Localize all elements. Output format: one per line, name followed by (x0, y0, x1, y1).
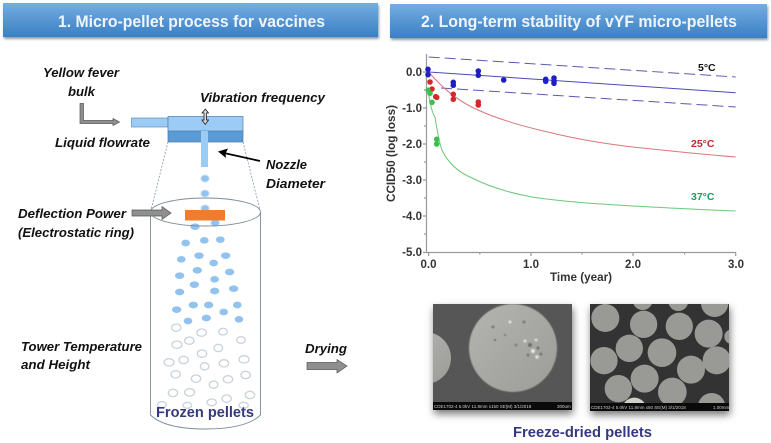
arrow: deflection power (132, 206, 171, 220)
data points 5C (425, 66, 557, 88)
tower cylinder (150, 198, 260, 429)
y axis labels (402, 67, 422, 259)
x axis labels: 3.0 (728, 259, 744, 271)
caption: freeze-dried pellets: Freeze-dried pellets (513, 425, 652, 441)
x axis labels (420, 259, 744, 271)
header: micro-pellet process (3, 3, 379, 39)
process labels: Deflection Power (18, 206, 127, 221)
liquid droplets (172, 220, 243, 324)
data points 37C (426, 88, 440, 147)
chart: stability over time (386, 54, 744, 284)
header: micro-pellet process: 1. Micro-pellet process for vaccines (58, 12, 325, 31)
y axis title: CCID50 (log loss) (386, 105, 398, 202)
photo: multiple freeze-dried pellets (590, 290, 739, 422)
x axis title: Time (year) (550, 272, 612, 284)
axes (423, 54, 736, 256)
y axis labels: -3.0 (402, 175, 422, 187)
series label 37C: 37°C (691, 191, 715, 203)
caption: frozen pellets: Frozen pellets (156, 405, 254, 421)
tower funnel (151, 142, 260, 210)
arrow: drying (307, 360, 347, 373)
photo: multiple freeze-dried pellets: 1.00mm (713, 405, 730, 410)
x axis labels: 1.0 (523, 259, 539, 271)
electrostatic ring (185, 210, 225, 220)
series label 5C: 5°C (698, 62, 716, 74)
process labels: bulk (68, 84, 96, 99)
photo: multiple freeze-dried pellets: CDE1702-4 5.0kV 11.8mm x50 SE(M) 3/1/2018 (591, 405, 686, 410)
process labels: Liquid flowrate (55, 135, 150, 150)
arrow: liquid flow (80, 104, 120, 126)
photo: single freeze-dried pellet: 300um (557, 404, 571, 409)
arrow: vibration (202, 109, 208, 124)
arrow: nozzle diameter (218, 148, 260, 161)
photo: single freeze-dried pellet: CDE1702-4 5.0kV 11.8mm x150 SE(M) 3/1/2018 (434, 404, 532, 409)
process labels: Nozzle (266, 157, 307, 172)
process labels (18, 65, 347, 372)
y axis labels: -2.0 (402, 139, 422, 151)
process labels: Diameter (266, 176, 326, 191)
nozzle head (132, 116, 243, 167)
curves (428, 57, 736, 211)
header: long-term stability (390, 4, 768, 40)
photo: single freeze-dried pellet (399, 304, 573, 414)
y axis labels: -1.0 (402, 103, 422, 115)
frozen pellets (158, 324, 255, 408)
x axis labels: 2.0 (625, 259, 641, 271)
process labels: (Electrostatic ring) (18, 225, 134, 240)
y axis labels: -4.0 (402, 211, 422, 223)
y axis labels: 0.0 (406, 67, 422, 79)
panel: micro-pellet process diagram (18, 65, 347, 429)
process labels: Vibration frequency (200, 90, 326, 105)
process labels: Drying (305, 341, 347, 356)
data points 25C (427, 79, 481, 108)
y axis labels: -5.0 (402, 247, 422, 259)
process labels: and Height (21, 357, 91, 372)
process labels: Tower Temperature (21, 339, 142, 354)
x axis labels: 0.0 (420, 259, 436, 271)
process labels: Yellow fever (43, 65, 120, 80)
header: long-term stability: 2. Long-term stability of vYF micro-pellets (421, 12, 737, 31)
falling drops above the ring (201, 175, 219, 226)
series label 25C: 25°C (691, 138, 715, 150)
